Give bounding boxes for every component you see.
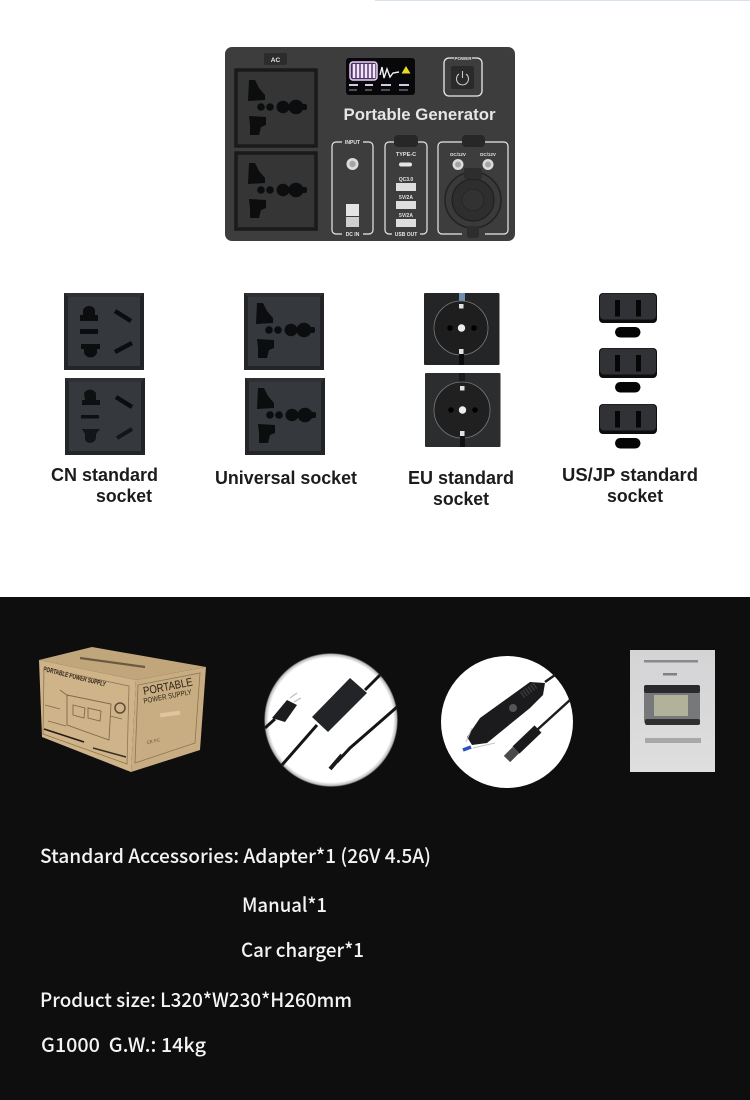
label: EU standard socket: socket: [433, 488, 489, 509]
power button: POWER: [454, 56, 472, 61]
car charger photo: [441, 656, 573, 788]
text: car charger: Car charger*1: [241, 934, 364, 963]
socket group: EU standard: [408, 293, 514, 509]
DC out group: [438, 135, 508, 238]
socket: CN top: [64, 293, 144, 370]
power button: [444, 56, 482, 96]
packaging box: PORTABLE POWER SUPPLY: [43, 666, 107, 688]
USB out group: TYPE-C: [396, 152, 416, 158]
text: product size: Product size: L320*W230*H260mm: [40, 984, 352, 1013]
label: US/JP standard socket: socket: [607, 485, 663, 506]
label: EU standard socket: [408, 467, 514, 509]
label: US/JP standard socket: US/JP standard: [562, 464, 698, 485]
input group: INPUT: [345, 140, 360, 146]
socket: EU bottom: [425, 373, 500, 447]
input group: DC IN: [346, 232, 360, 238]
USB out group: [385, 135, 427, 238]
socket: universal bottom: [245, 378, 325, 455]
accessories text: [40, 840, 431, 1058]
socket: universal top: [244, 293, 324, 370]
DC out group: DC/12V: [480, 152, 496, 157]
panel title: Portable Generator: [344, 105, 496, 124]
adapter photo: [264, 653, 398, 787]
packaging box: PORTABLE: [142, 677, 194, 698]
packaging box: [39, 647, 206, 772]
AC label: AC: [271, 57, 280, 64]
socket: panel upper universal: [236, 70, 316, 146]
panel: portable generator front panel: [225, 47, 515, 241]
DC out group: DC/12V: [450, 152, 466, 157]
socket group: US/JP standard: [562, 293, 698, 506]
label: CN standard socket: socket: [96, 485, 152, 506]
USB out group: 5V/2A: [399, 213, 413, 219]
panel: accessories background: [0, 597, 750, 1100]
socket group: CN standard: [51, 293, 158, 506]
label: Universal socket: Universal socket: [215, 467, 357, 488]
socket: EU top: [424, 293, 500, 365]
socket group: Universal: [215, 293, 357, 488]
top accent line: [375, 0, 750, 1]
label: US/JP standard socket: [562, 464, 698, 506]
text: standard accessories adapter: Standard Accessories: Adapter*1 (26V 4.5A): [40, 840, 431, 869]
display screen: [346, 58, 415, 95]
USB out group: 5V/2A: [399, 195, 413, 201]
packaging box: POWER SUPPLY: [143, 687, 192, 705]
input group: [332, 140, 373, 238]
text: manual: Manual*1: [242, 889, 327, 918]
socket: CN bottom: [65, 378, 145, 455]
socket: US middle: [599, 348, 657, 392]
label: EU standard socket: EU standard: [408, 467, 514, 488]
packaging box: CE FC: [146, 737, 161, 745]
label: CN standard socket: CN standard: [51, 464, 158, 485]
manual photo: [630, 650, 715, 772]
label: CN standard socket: [51, 464, 158, 506]
USB out group: USB OUT: [395, 232, 417, 238]
text: gross weight: G1000 G.W.: 14kg: [41, 1029, 206, 1058]
socket: US bottom: [599, 404, 657, 448]
socket: US top: [599, 293, 657, 338]
USB out group: QC3.0: [399, 177, 413, 183]
socket: panel lower universal: [236, 153, 316, 229]
AC label: [264, 53, 287, 65]
